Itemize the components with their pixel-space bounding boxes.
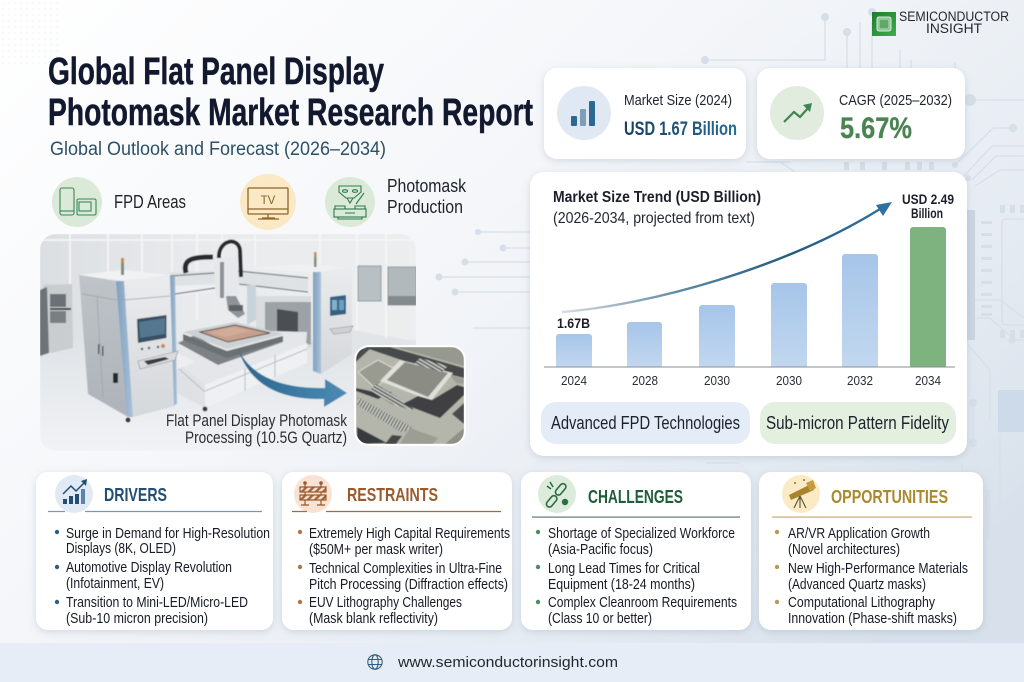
stage [178,335,283,365]
x axis labels: 2030 [704,374,730,388]
bullet list: Innovation (Phase-shift masks) [788,611,957,627]
label: Market Size (2024) [624,92,732,109]
category: TV icon: TV [261,195,276,207]
label: Photomask Production [387,176,467,217]
logo mark [872,12,896,36]
panel: drivers [36,472,273,630]
panel: restraints [282,472,512,630]
logo wordmark [899,9,1009,36]
icon: road barrier [294,475,332,513]
title: Photomask Market Research Report [48,92,533,134]
bullet list: (Sub-10 micron precision) [66,611,208,627]
bullet list: (Asia-Pacific focus) [548,542,653,558]
footer band [0,643,1024,682]
bullet list: ($50M+ per mask writer) [309,542,443,558]
category: FPD areas [52,177,186,227]
left cabinet [82,270,162,281]
bullet list: (Class 10 or better) [548,611,652,627]
website url: www.semiconductorinsight.com [397,654,618,671]
base cabinet [272,330,308,345]
logo [872,9,1009,36]
x axis labels: 2030 [776,374,802,388]
caption text [166,411,347,447]
pill: Sub-micron Pattern Fidelity [760,402,956,444]
icon: globe [368,655,382,669]
bullet list [298,526,510,627]
icon: bar chart [557,86,611,140]
value: USD 1.67 Billion [624,119,737,140]
label: Photomask Production: Photomask [387,176,467,196]
icon: telescope [782,475,820,513]
value label USD 2.49 Billion: USD 2.49 [902,192,954,207]
bullet list: (Infotainment, EV) [66,576,164,592]
icon: broken chain [538,475,576,513]
label: CAGR (2025–2032) [839,92,952,109]
bullet list: Displays (8K, OLED) [66,541,176,557]
title [48,51,533,134]
value: 5.67% [840,112,912,145]
value label 1.67B: 1.67B [557,316,590,331]
trend arrow [562,202,892,312]
photo: photomask processing machine [40,234,466,451]
bullet list: Long Lead Times for Critical [548,561,700,577]
chart heading: Market Size Trend (USD Billion) [553,189,761,206]
pill: Advanced FPD Technologies: Advanced FPD Technologies [551,413,740,433]
panel: market size trend chart [530,172,967,456]
icon: rising chart [55,475,93,513]
bullet list: Shortage of Specialized Workforce [548,526,735,542]
heading: OPPORTUNITIES [831,487,948,507]
chart heading [553,189,761,227]
category: photomask production [325,176,467,227]
card: CAGR [757,68,965,159]
value label USD 2.49 Billion: Billion [911,206,943,221]
bullet list [536,526,737,627]
heading: CHALLENGES [588,487,683,507]
caption text: Processing (10.5G Quartz) [185,428,347,447]
bullet list: New High-Performance Materials [788,561,968,577]
title: Global Flat Panel Display [48,51,384,93]
window panels [358,266,381,301]
blue arrow [238,349,347,407]
logo wordmark: INSIGHT [926,21,982,36]
x axis labels: 2032 [847,374,873,388]
bullet list [775,526,968,627]
heading: DRIVERS [104,485,167,505]
value label USD 2.49 Billion [902,192,954,221]
shelf-side table [176,358,182,369]
bullet list: Automotive Display Revolution [66,560,232,576]
bullet list: (Mask blank reflectivity) [309,611,438,627]
bullet list: EUV Lithography Challenges [309,595,462,611]
x axis labels: 2034 [915,374,941,388]
bullet list: Pitch Processing (Diffraction effects) [309,577,508,593]
bars [556,227,946,367]
x axis labels [561,374,941,388]
card: market size 2024 [544,68,746,159]
background machine [43,284,73,353]
icon: phone and tablet [52,177,102,227]
bullet list: Complex Cleanroom Requirements [548,595,737,611]
bullet list: Surge in Demand for High-Resolution [66,526,270,542]
bullet list: Transition to Mini-LED/Micro-LED [66,595,248,611]
x axis labels: 2024 [561,374,587,388]
inset: photomask pattern close-up [354,345,466,446]
logo wordmark: SEMICONDUCTOR [899,9,1009,24]
subtitle: Global Outlook and Forecast (2026–2034) [50,139,386,160]
category: TV icon [240,174,296,230]
bullet list: (Novel architectures) [788,542,900,558]
pill: Sub-micron Pattern Fidelity: Sub-micron Pattern Fidelity [766,413,949,433]
caption text: Flat Panel Display Photomask [166,411,347,430]
x axis labels: 2028 [632,374,658,388]
chart heading: (2026-2034, projected from text) [553,210,755,227]
panel: opportunities [759,472,983,630]
label: Photomask Production: Production [387,197,463,217]
bullet list: Extremely High Capital Requirements [309,526,510,542]
panel: challenges [521,472,751,630]
bullet list: Technical Complexities in Ultra-Fine [309,561,502,577]
right cabinet [248,264,352,273]
bullet list: Equipment (18-24 months) [548,577,695,593]
bullet list [55,526,270,627]
icon: photomask press [325,177,375,227]
label: FPD Areas: FPD Areas [114,192,186,212]
bullet list: AR/VR Application Growth [788,526,930,542]
bullet list: (Advanced Quartz masks) [788,577,926,593]
pill: Advanced FPD Technologies [541,402,750,444]
bullet list: Computational Lithography [788,595,936,611]
heading: RESTRAINTS [347,485,438,505]
gantry [240,272,308,290]
inner chamber [256,296,311,348]
icon: trend arrow [770,86,824,140]
